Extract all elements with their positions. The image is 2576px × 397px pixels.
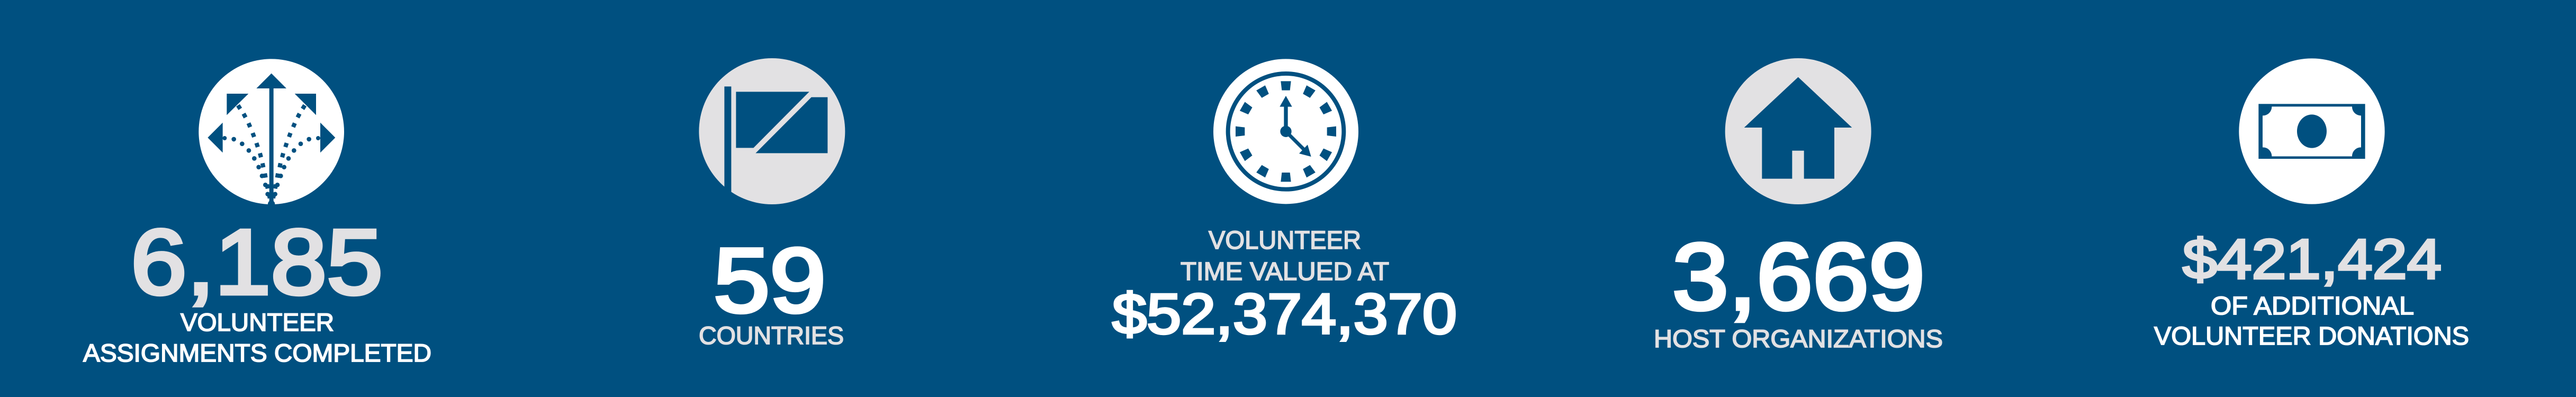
icon: banknote	[2239, 58, 2385, 204]
label: host organizations: HOST ORGANIZATIONS	[1654, 324, 1943, 353]
stat: $52,374,370: $52,374,370	[1112, 282, 1457, 346]
panel: countries	[699, 58, 845, 349]
stat: $421,424: $421,424	[2183, 228, 2442, 291]
icon: house	[1725, 58, 1871, 204]
panel: host organizations	[1654, 58, 1943, 353]
icon: clock	[1213, 59, 1358, 204]
stat: 59: 59	[714, 230, 826, 331]
panel: additional donations	[2154, 58, 2469, 350]
label: time valued at: TIME VALUED AT	[1181, 258, 1389, 286]
stat: 3,669: 3,669	[1672, 224, 1925, 329]
label: volunteer: VOLUNTEER	[181, 308, 334, 336]
panel: volunteer time	[1112, 59, 1457, 346]
icon: arrows spreading from one point	[199, 59, 344, 207]
icon: flag	[699, 58, 845, 204]
label: countries: COUNTRIES	[699, 321, 844, 349]
stat: 6,185: 6,185	[131, 210, 383, 313]
label: volunteer: VOLUNTEER	[1209, 227, 1361, 255]
label: of additional: OF ADDITIONAL	[2211, 292, 2414, 320]
panel: volunteer assignments	[83, 59, 431, 367]
label: volunteer donations: VOLUNTEER DONATIONS	[2154, 322, 2469, 350]
label: assignments completed: ASSIGNMENTS COMPLETED	[83, 339, 431, 367]
